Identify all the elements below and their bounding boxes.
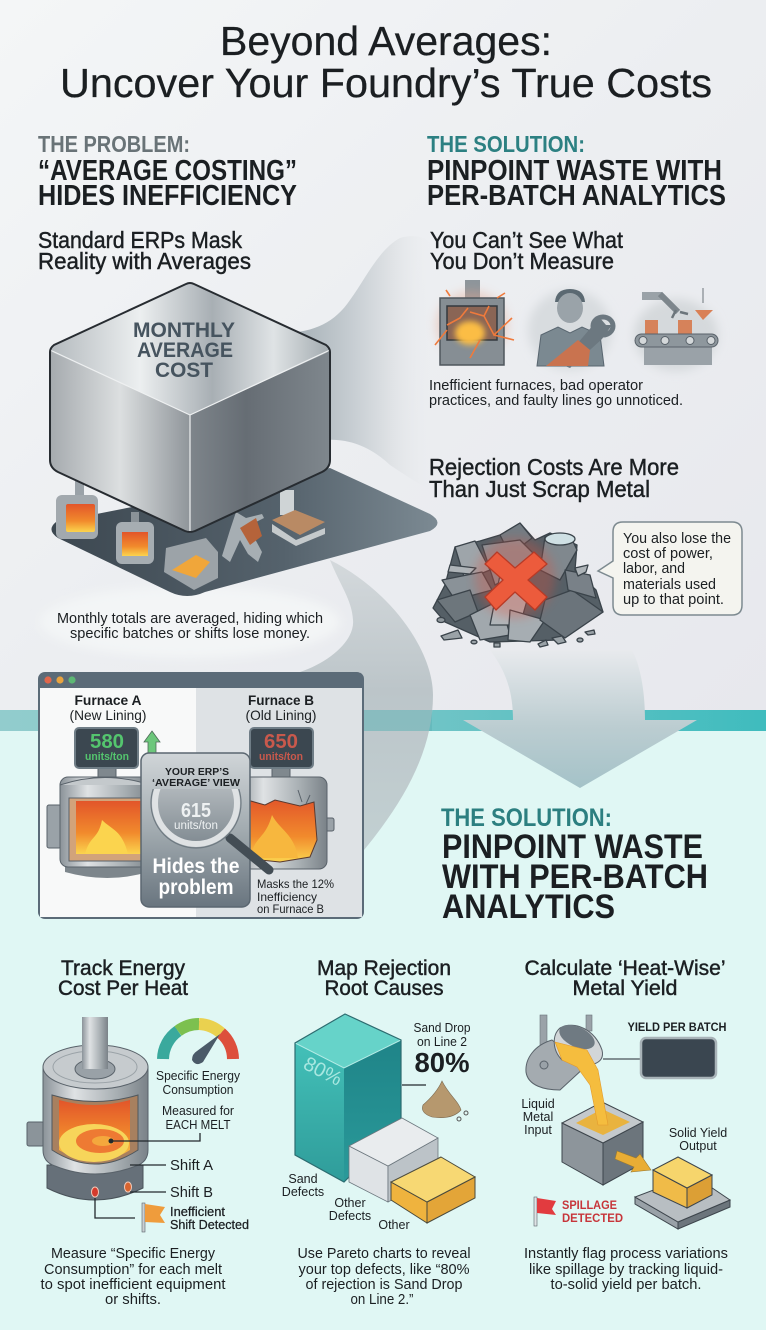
text: monthly totals caption: specific batches or shifts lose money. — [70, 626, 310, 642]
cube label: AVERAGE — [137, 339, 233, 362]
heading: Metal Yield — [572, 977, 678, 1000]
furnace B label: Furnace B — [248, 692, 314, 708]
labels: defect categories — [282, 1172, 410, 1232]
gray bar — [349, 1118, 438, 1202]
heading: Root Causes — [324, 977, 444, 1000]
red X mark — [485, 552, 547, 610]
text: masks inefficiency — [257, 877, 334, 916]
icon: energy gauge — [161, 1022, 235, 1064]
panel: heat-wise metal yield — [521, 957, 730, 1293]
gold bar — [391, 1157, 475, 1223]
heading: the solution: THE SOLUTION: — [427, 131, 585, 157]
heading: Calculate ‘Heat-Wise’ — [524, 957, 726, 980]
text: monthly totals caption — [57, 611, 323, 642]
labels: defect categories: Sand — [288, 1172, 318, 1186]
window dots — [44, 676, 76, 684]
labels: defect categories: Defects — [282, 1185, 324, 1199]
labels: defect categories: Defects — [329, 1209, 371, 1223]
labels: defect categories: Other — [378, 1218, 410, 1232]
callout: sand drop: on Line 2 — [417, 1035, 467, 1049]
text: pareto description: Use Pareto charts to reveal — [298, 1245, 470, 1262]
cube label — [133, 319, 235, 382]
text: monthly totals caption: Monthly totals are averaged, hiding which — [57, 611, 323, 627]
heading: Map Rejection — [317, 957, 451, 980]
subheading: rejection costs: Than Just Scrap Metal — [429, 476, 650, 502]
text: pareto description — [298, 1245, 470, 1308]
title: Uncover Your Foundry’s True Costs — [60, 60, 712, 106]
furnace A illustration — [47, 767, 154, 878]
cube right face — [190, 350, 330, 533]
text: pareto description: your top defects, like “80% — [298, 1261, 470, 1278]
icon: cracked block — [164, 538, 218, 590]
icon: worker — [222, 512, 264, 562]
heading: the solution large: THE SOLUTION: — [441, 804, 612, 832]
flag: inefficient shift detected: Shift Detected — [170, 1218, 249, 1232]
cube left face — [50, 350, 190, 533]
heading: the solution large: WITH PER-BATCH — [442, 858, 708, 896]
callout: hidden costs: labor, and — [623, 560, 685, 577]
subheading: rejection costs — [429, 454, 679, 502]
heading: the problem: THE PROBLEM: — [38, 131, 190, 157]
furnace A label: (New Lining) — [70, 707, 146, 723]
text: energy description — [40, 1245, 226, 1308]
subheading: can't see: You Don’t Measure — [430, 248, 614, 274]
label: solid yield output: Output — [679, 1139, 717, 1153]
icon: faulty conveyor line — [634, 288, 718, 371]
monitor: furnace A 580: 580 — [90, 731, 124, 753]
flag: spillage detected: DETECTED — [562, 1211, 623, 1225]
subheading: can't see — [430, 227, 624, 274]
text: energy description: Measure “Specific Energy — [51, 1245, 215, 1262]
subheading: can't see: You Can’t See What — [430, 227, 624, 253]
heading: the problem: “AVERAGE COSTING” — [38, 155, 297, 187]
heading: the solution: PINPOINT WASTE WITH — [427, 155, 722, 187]
callout: sand drop: Sand Drop — [414, 1021, 471, 1035]
text: pareto description: on Line 2.” — [350, 1291, 414, 1308]
molten pour — [555, 1042, 608, 1125]
card: ERP's average view — [141, 753, 269, 907]
card: ERP's average view: Hides the — [152, 855, 240, 878]
text: yield description: Instantly flag process variations — [524, 1245, 728, 1262]
text: energy description: or shifts. — [105, 1291, 161, 1308]
label: liquid metal input: Metal — [523, 1110, 553, 1124]
panel: energy cost per heat — [27, 957, 249, 1308]
label: shift A — [130, 1157, 213, 1174]
down arrow — [463, 650, 697, 788]
mold block — [562, 1102, 643, 1185]
lower connector swoosh — [300, 560, 433, 850]
label: liquid metal input: Input — [524, 1123, 552, 1137]
gauge label: Specific Energy — [156, 1068, 240, 1083]
subheading: rejection costs: Rejection Costs Are More — [429, 454, 679, 480]
teal bar 80%: 80% — [300, 1053, 346, 1091]
label: solid yield output — [669, 1126, 727, 1153]
label: liquid metal input — [521, 1097, 555, 1137]
panel: rejection root causes — [282, 957, 475, 1308]
band tint through the swoosh — [362, 710, 432, 731]
text: energy description: to spot inefficient equipment — [40, 1276, 226, 1293]
text: energy description: Consumption” for each melt — [44, 1261, 223, 1278]
callout: hidden costs — [598, 522, 742, 615]
callout: hidden costs: up to that point. — [623, 591, 724, 608]
subheading: standard ERPs — [38, 227, 251, 274]
shop-floor items under the cube — [56, 480, 325, 590]
flag: inefficient shift detected — [95, 1198, 249, 1232]
solid yield cube on plate — [635, 1157, 730, 1229]
text: masks inefficiency: Inefficiency — [257, 890, 317, 904]
label: solid yield output: Solid Yield — [669, 1126, 727, 1140]
furnace B illustration — [236, 767, 334, 869]
callout: sand drop — [402, 1021, 471, 1121]
icon: magnifier: 615 — [181, 800, 211, 822]
teal bar 80% — [295, 1014, 401, 1182]
title: Beyond Averages: — [220, 18, 552, 64]
text: yield description — [524, 1245, 728, 1293]
heading: the solution — [427, 131, 726, 212]
pareto chart — [295, 1014, 475, 1223]
monitor: furnace B 650: units/ton — [259, 751, 303, 763]
heading: Track Energy — [61, 957, 185, 980]
gauge label: Consumption — [162, 1082, 234, 1097]
monthly average cost cube — [50, 283, 330, 533]
icon: scrap pile with red X — [433, 523, 603, 647]
text: masks inefficiency: on Furnace B — [257, 902, 324, 916]
callout: sand drop: 80% — [414, 1047, 470, 1078]
icon: cracked furnace — [435, 280, 514, 365]
cube top face — [51, 283, 329, 415]
cube label: MONTHLY — [133, 319, 235, 342]
heading: the solution: PER-BATCH ANALYTICS — [427, 180, 726, 212]
caption backdrop — [40, 586, 340, 658]
gauge label — [156, 1068, 240, 1097]
heading: the solution large: PINPOINT WASTE — [442, 828, 703, 866]
callout: hidden costs: cost of power, — [623, 545, 713, 562]
title — [60, 18, 712, 106]
icon: small furnace 2 — [116, 512, 154, 564]
panel: furnace comparison window — [38, 672, 364, 919]
flag: spillage detected: SPILLAGE — [562, 1198, 617, 1212]
upper connector swoosh — [285, 236, 447, 495]
text: unnoticed: Inefficient furnaces, bad operator — [429, 377, 643, 394]
arrow to solid yield — [615, 1151, 651, 1172]
icon: crawler machine — [272, 490, 325, 546]
text: unnoticed — [429, 377, 683, 409]
icon: magnifier — [150, 789, 274, 874]
text: yield description: to-solid yield per batch. — [550, 1276, 702, 1293]
card: ERP's average view: ‘AVERAGE’ VIEW — [152, 777, 240, 789]
flag: inefficient shift detected: Inefficient — [170, 1205, 226, 1219]
label: shift B — [130, 1184, 213, 1201]
monitor: furnace B 650: 650 — [264, 731, 298, 753]
icon: magnifier: units/ton — [174, 820, 218, 832]
icon: small furnace 1 — [56, 480, 98, 539]
yield per batch display: YIELD PER BATCH — [628, 1022, 726, 1034]
furnace A label — [70, 692, 146, 723]
card: ERP's average view: YOUR ERP’S — [165, 766, 229, 778]
monitor: furnace A 580: units/ton — [85, 751, 129, 763]
text: masks inefficiency: Masks the 12% — [257, 877, 334, 891]
heading — [58, 957, 188, 1000]
label: shift B: Shift B — [170, 1184, 213, 1201]
heading — [317, 957, 451, 1000]
monitor: furnace A 580 — [75, 728, 138, 768]
card: ERP's average view: problem — [158, 876, 234, 899]
icon: operator with wrench — [528, 289, 613, 370]
text: unnoticed: practices, and faulty lines go unnoticed. — [429, 392, 683, 409]
subheading: standard ERPs: Reality with Averages — [38, 248, 251, 274]
heading — [524, 957, 726, 1000]
heading: Cost Per Heat — [58, 977, 188, 1000]
label: measured for each melt — [108, 1103, 235, 1144]
icon: pouring ladle — [526, 1015, 603, 1090]
floor under the cube — [51, 468, 438, 596]
label: liquid metal input: Liquid — [521, 1097, 555, 1111]
flag: spillage detected — [534, 1197, 623, 1226]
cube label: COST — [155, 359, 213, 382]
furnace B label — [246, 692, 316, 723]
heading: the problem: HIDES INEFFICIENCY — [38, 180, 297, 212]
heading: the solution large — [441, 804, 708, 926]
label: shift A: Shift A — [170, 1157, 213, 1174]
yield per batch display — [603, 1022, 726, 1078]
label: measured for each melt: Measured for — [162, 1103, 235, 1118]
green up arrow — [144, 731, 160, 756]
callout: hidden costs: You also lose the — [623, 530, 731, 547]
text: pareto description: of rejection is Sand Drop — [306, 1276, 462, 1293]
furnace B label: (Old Lining) — [246, 707, 316, 723]
furnace A label: Furnace A — [74, 692, 142, 708]
text: yield description: like spillage by tracking liquid- — [529, 1261, 723, 1278]
heading: the solution large: ANALYTICS — [442, 888, 615, 926]
label: measured for each melt: EACH MELT — [166, 1117, 231, 1132]
labels: defect categories: Other — [334, 1196, 366, 1210]
monitor: furnace B 650 — [250, 728, 313, 768]
callout: hidden costs: materials used — [623, 576, 716, 593]
icon: large furnace — [27, 1017, 148, 1200]
subheading: standard ERPs: Standard ERPs Mask — [38, 227, 242, 253]
heading: the problem — [38, 131, 297, 212]
